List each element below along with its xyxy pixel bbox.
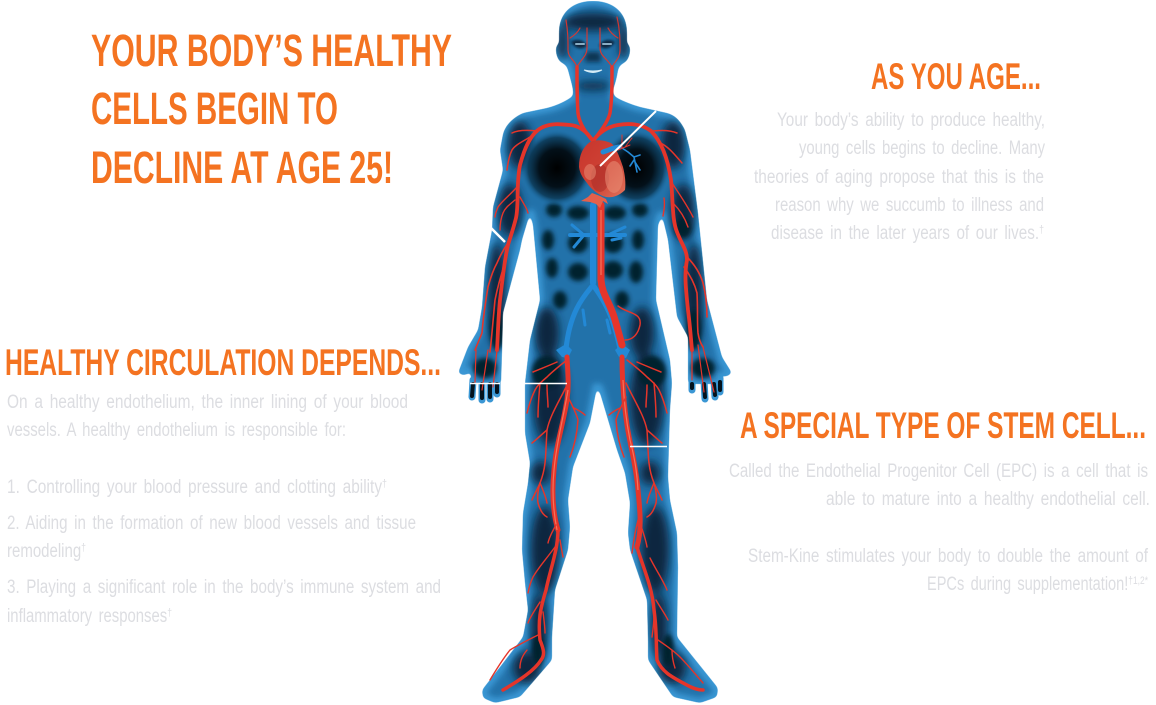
text block: special stem cell: †1,2* (1128, 575, 1149, 587)
text block: healthy circulation: inflammatory responses (7, 606, 212, 627)
left thigh branches (527, 360, 585, 517)
text block: as you age: Your body’s ability to produce healthy, (777, 110, 1045, 131)
fingers shading (472, 382, 720, 398)
text block: as you age: theories of aging propose that this is the (754, 167, 1044, 188)
text block: healthy circulation: † (167, 607, 172, 619)
text block: healthy circulation (7, 392, 441, 627)
panel: healthy circulation (5, 342, 441, 627)
text block: as you age: disease in the later years of our lives. (771, 223, 1106, 244)
text block: healthy circulation: vessels. A healthy endothelium is responsible for: (7, 420, 346, 441)
icon: heart (579, 135, 640, 208)
panel: as you age (754, 56, 1045, 244)
text block: as you age: reason why we succumb to illness and (775, 195, 1044, 216)
title (91, 25, 452, 193)
text block: healthy circulation: 2. Aiding in the formation of new blood vessels and tissue (7, 513, 416, 534)
body silhouette with shading (445, 0, 745, 705)
pointer line: thigh (470, 382, 567, 384)
heading: as you age: AS YOU AGE... (871, 56, 1041, 97)
pointer line: arm (491, 228, 505, 242)
title: DECLINE AT AGE 25! (91, 142, 393, 193)
text block: healthy circulation: † (382, 478, 387, 490)
right thigh branches (609, 360, 667, 517)
title: YOUR BODY’S HEALTHY (91, 25, 452, 76)
face details (571, 40, 615, 78)
lower leg and foot branches (490, 520, 703, 683)
artery highlights (553, 210, 638, 530)
text block: as you age: young cells begins to decline. Many (799, 138, 1045, 159)
title: CELLS BEGIN TO (91, 83, 338, 134)
text block: healthy circulation: † (81, 542, 86, 554)
pointer line: heart (600, 111, 656, 166)
human body figure (445, 0, 745, 705)
heading: healthy circulation: HEALTHY CIRCULATION DEPENDS... (5, 342, 441, 383)
text block: healthy circulation: remodeling (7, 541, 101, 562)
text block: healthy circulation: 3. Playing a significant role in the body’s immune system and (7, 577, 441, 598)
text block: healthy circulation: On a healthy endothelium, the inner lining of your blood (7, 392, 408, 413)
arteries: red vessels (475, 17, 714, 690)
text block: special stem cell (729, 461, 1150, 595)
text block: as you age: † (1039, 224, 1044, 236)
text block: healthy circulation: 1. Controlling your blood pressure and clotting ability (7, 477, 469, 498)
panel: special stem cell (729, 405, 1150, 595)
pointer line: lower thigh (630, 446, 667, 448)
veins: blue vessels (556, 205, 630, 358)
text block: as you age (754, 110, 1045, 244)
